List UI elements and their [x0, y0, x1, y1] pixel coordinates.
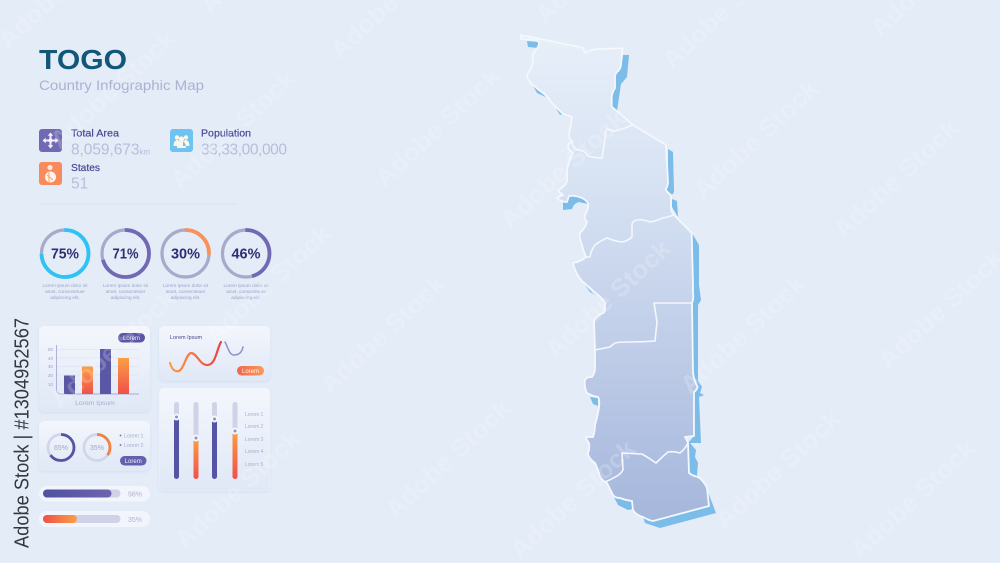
donut: 30%: 30%	[171, 246, 200, 262]
watermark: Adobe Stock	[45, 25, 181, 154]
panel: sliders	[159, 388, 270, 491]
legend: Lorem 2	[124, 443, 143, 449]
watermark: Adobe Stock	[170, 425, 306, 554]
donut: 46%: amet, consectetuer	[226, 289, 266, 294]
panel: line chart: Lorem Ipsum	[170, 335, 203, 341]
stat: states: States	[71, 163, 100, 174]
slider tracks	[174, 402, 238, 479]
panel: bar chart: Lorem Ipsum	[75, 400, 115, 407]
donut: 71%: Lorem Ipsum dolor sit	[103, 283, 149, 288]
donut 35%: 35%	[90, 445, 104, 452]
donut: 75%	[42, 230, 88, 300]
watermark: Adobe Stock	[370, 63, 506, 192]
stat: total area	[39, 128, 150, 158]
purple wave	[225, 342, 243, 355]
watermark: Adobe Stock	[45, 285, 181, 414]
map shadow pieces	[527, 41, 716, 528]
stat: population	[170, 128, 287, 158]
slider labels: Lorem 4	[245, 449, 264, 455]
region borders	[572, 125, 692, 482]
slider knobs	[173, 414, 238, 442]
slider labels: Lorem 3	[245, 437, 264, 443]
stat: total area: 8,059,673km	[71, 142, 150, 158]
watermark: Adobe Stock	[710, 405, 846, 534]
watermark: Adobe Stock	[688, 75, 824, 204]
bar chart grid and axes: 10	[48, 382, 53, 387]
watermark: Adobe Stock	[505, 435, 641, 563]
panel: small donuts	[39, 421, 150, 471]
slider labels: Lorem 2	[245, 424, 264, 430]
bar chart grid and axes	[48, 345, 139, 394]
donut: 71%	[102, 230, 149, 300]
donut: 46%: adipiscing elit.	[231, 295, 261, 300]
watermark: Adobe Stock	[315, 270, 451, 399]
donut: 71%: amet, consectetuer	[106, 289, 146, 294]
icon: people	[170, 129, 193, 152]
icon: area arrows	[39, 129, 62, 152]
watermark: Adobe Stock	[380, 395, 516, 524]
watermark: Adobe Stock	[165, 65, 301, 194]
legend: Lorem 1	[124, 434, 143, 440]
icon: map pin	[39, 162, 62, 185]
watermark: Adobe Stock	[828, 115, 964, 244]
title: TOGO	[39, 44, 127, 75]
donut: 75%: adipiscing elit.	[50, 295, 80, 300]
slider labels: Lorem 5	[245, 462, 264, 468]
donut: 30%: adipiscing elit.	[171, 295, 200, 300]
donut: 30%: amet, consectetuer	[166, 289, 206, 294]
slider fills	[174, 417, 238, 479]
donut: 75%: Lorem Ipsum dolor sit	[42, 283, 88, 288]
progress bar: 35%	[39, 511, 150, 527]
donut: 46%: Lorem Ipsum dolor sit	[223, 283, 269, 288]
watermark: Adobe Stock	[873, 245, 1000, 374]
donut 65%: 65%	[54, 445, 68, 452]
legend	[120, 434, 143, 449]
donut: 46%	[222, 230, 270, 300]
donut: 30%: Lorem Ipsum dolor sit	[163, 283, 209, 288]
slider labels: Lorem 1	[245, 412, 264, 418]
watermark: Adobe Stock	[675, 270, 811, 399]
donut: 75%: amet, consectetuer	[45, 289, 85, 294]
watermark: Adobe Stock	[200, 220, 336, 349]
divider	[40, 204, 237, 205]
progress bar: 98%	[39, 486, 150, 502]
donut: 30%	[162, 230, 209, 300]
watermark: Adobe Stock	[845, 435, 981, 563]
orange wave	[170, 342, 221, 371]
bar chart grid and axes: 40	[48, 356, 53, 361]
vertical stock id text: Adobe Stock | #1304952567	[12, 318, 34, 548]
watermark: Adobe Stock	[540, 235, 676, 364]
panel: bar chart	[39, 326, 150, 412]
pill label: Lorem	[242, 369, 259, 375]
stat: population: Population	[201, 128, 251, 140]
watermark: Adobe Stock	[495, 105, 631, 234]
stat: population: 33,33,00,000	[201, 142, 287, 158]
bar chart grid and axes: 50	[48, 347, 53, 352]
bar chart grid and axes: 20	[48, 373, 53, 378]
stat: states: 51	[71, 176, 88, 192]
bars	[64, 349, 129, 394]
bar chart grid and axes: 30	[48, 364, 53, 369]
donut: 75%: 75%	[51, 246, 79, 262]
pill label: Lorem	[123, 336, 140, 342]
donut: 46%: 46%	[232, 246, 261, 262]
donut: 71%: adipiscing elit.	[111, 295, 140, 300]
stat: states	[39, 162, 100, 192]
progress bar: 98%: 98%	[128, 491, 142, 498]
map: Togo	[521, 35, 716, 528]
donut: 71%: 71%	[112, 246, 139, 262]
panel: line chart	[159, 326, 270, 381]
map silhouette	[521, 35, 709, 521]
pill label: Lorem	[125, 459, 142, 465]
subtitle: Country Infographic Map	[39, 77, 204, 93]
progress bar: 35%: 35%	[128, 517, 142, 524]
stat: total area: Total Area	[71, 128, 119, 140]
